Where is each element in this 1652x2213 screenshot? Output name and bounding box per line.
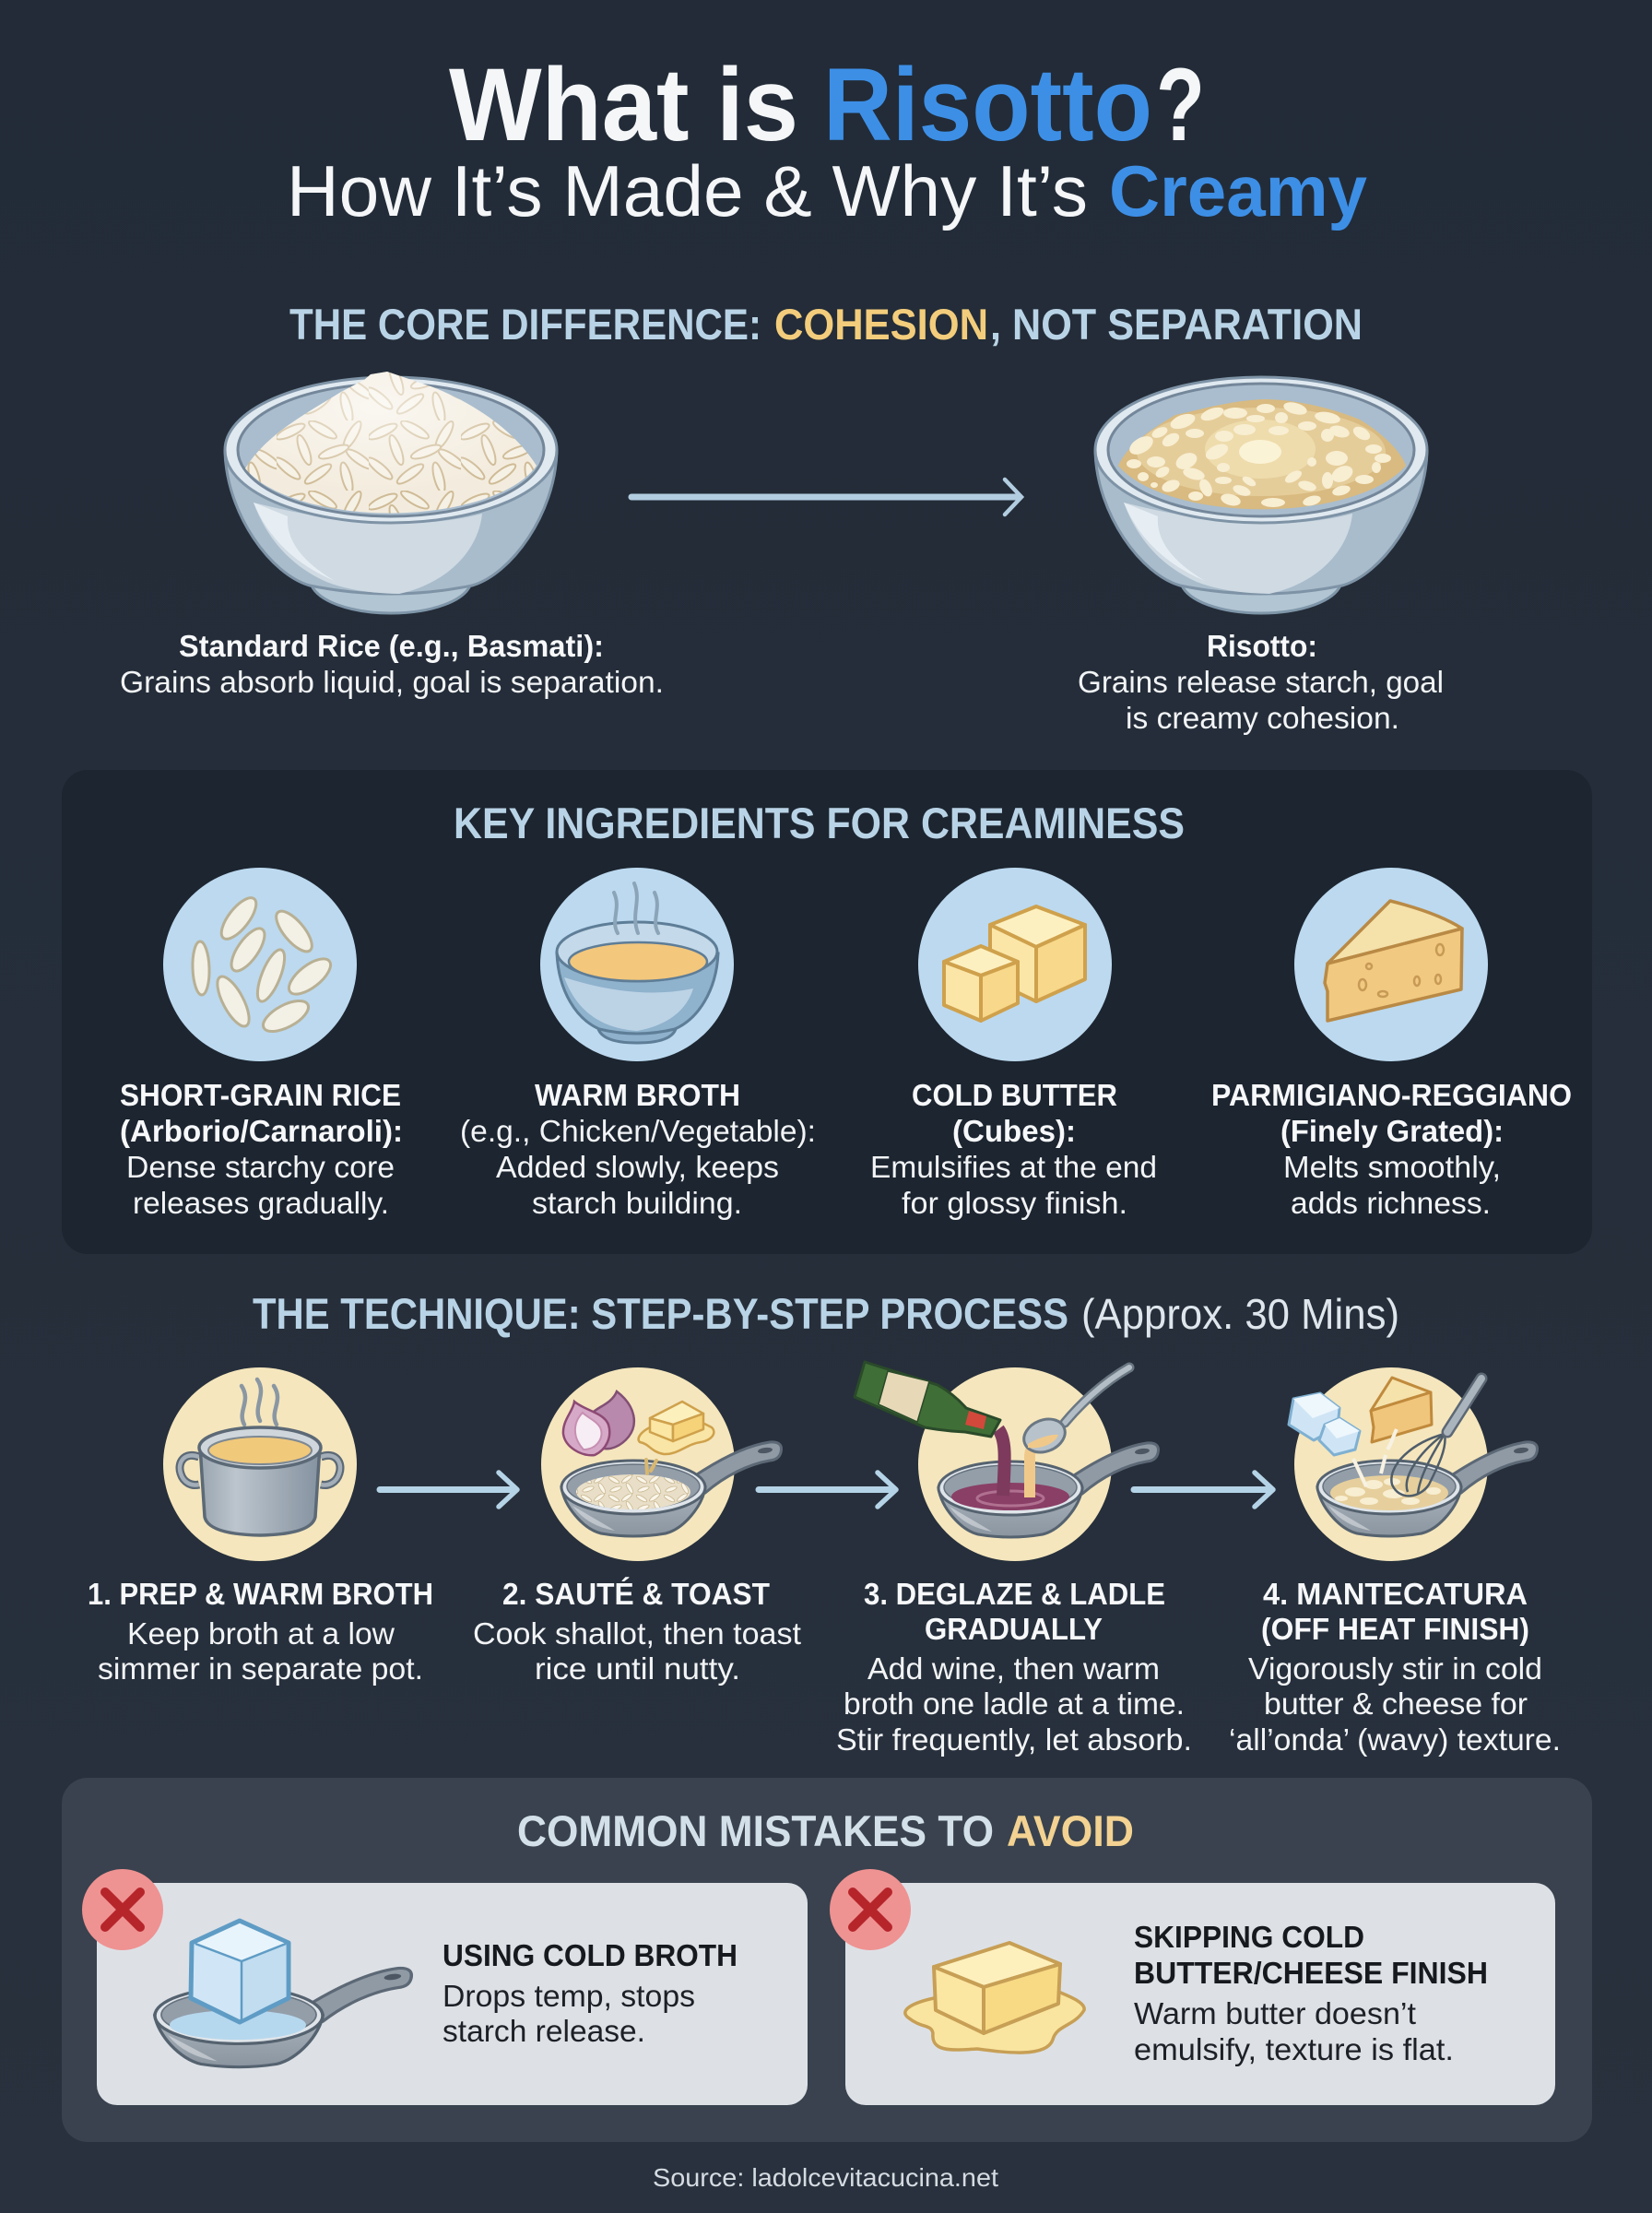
ingredient text: warm broth: starch building.: [532, 1186, 742, 1220]
arrow: rice to risotto: [631, 479, 1021, 515]
arrow: step 1 to 2: [380, 1473, 517, 1507]
text: skipping cold butter: Warm butter doesn’t: [1134, 1996, 1416, 2030]
step 2 text: [473, 1577, 801, 1686]
panel: key ingredients: [62, 770, 1592, 1254]
heading: key ingredients: KEY INGREDIENTS FOR CREAMINESS: [454, 799, 1185, 847]
heading: technique: THE TECHNIQUE: STEP-BY-STEP PROCESS: [253, 1289, 1068, 1338]
heading: core difference: COHESION: [774, 300, 988, 349]
icon: short-grain rice: [163, 868, 357, 1061]
step 4 text: Vigorously stir in cold: [1248, 1651, 1542, 1686]
heading: technique: (Approx. 30 Mins): [1081, 1290, 1399, 1338]
heading: core difference: THE CORE DIFFERENCE:: [289, 300, 761, 349]
ingredient text: parmigiano: (Finely Grated):: [1280, 1114, 1504, 1148]
ingredient text: cold butter: (Cubes):: [952, 1114, 1076, 1148]
text: skipping cold butter: emulsify, texture is flat.: [1134, 2032, 1454, 2066]
text: using cold broth: Drops temp, stops: [442, 1979, 695, 2013]
step 2 icon: shallot, butter, pan: [541, 1367, 782, 1561]
whisk: [1391, 1379, 1481, 1496]
step 3 text: Add wine, then warm: [867, 1651, 1160, 1686]
ingredient text: short-grain rice: releases gradually.: [133, 1186, 389, 1220]
ingredient text: cold butter: COLD BUTTER: [912, 1078, 1117, 1112]
panel: common mistakes: [62, 1778, 1592, 2142]
ingredient text: parmigiano: Melts smoothly,: [1283, 1150, 1501, 1184]
caption: standard rice: Grains absorb liquid, goal is separation.: [120, 665, 664, 699]
subtitle: Creamy: [1109, 150, 1367, 231]
arrow: step 3 to 4: [1134, 1473, 1273, 1507]
icon: cold butter: [918, 868, 1112, 1061]
step 3 text: broth one ladle at a time.: [844, 1686, 1185, 1721]
icon: melting butter: [905, 1943, 1084, 2053]
step 4 text: ‘all’onda’ (wavy) texture.: [1229, 1722, 1561, 1757]
step 3 text: [836, 1577, 1192, 1757]
caption: risotto: [1078, 629, 1444, 735]
heading: common mistakes: COMMON MISTAKES TO: [517, 1806, 994, 1855]
ingredient text: short-grain rice: SHORT-GRAIN RICE: [120, 1078, 401, 1112]
icon: parmigiano: [1294, 868, 1488, 1061]
badge: red x: [82, 1869, 163, 1950]
step 1 text: simmer in separate pot.: [98, 1651, 423, 1686]
source line: Source: ladolcevitacucina.net: [653, 2163, 998, 2192]
caption: risotto: Grains release starch, goal: [1078, 665, 1444, 699]
illustration: standard rice bowl: [225, 372, 557, 613]
text: skipping cold butter: BUTTER/CHEESE FINISH: [1134, 1956, 1488, 1990]
text: using cold broth: [442, 1938, 738, 2048]
heading: core difference: [289, 300, 1363, 349]
step 3 text: GRADUALLY: [925, 1612, 1103, 1646]
text: using cold broth: starch release.: [442, 2014, 645, 2048]
step 4 text: [1229, 1577, 1561, 1757]
title: Risotto: [823, 47, 1152, 162]
ingredient text: warm broth: (e.g., Chicken/Vegetable):: [460, 1114, 816, 1148]
cheese wedge: [1371, 1378, 1432, 1442]
ingredient text: short-grain rice: (Arborio/Carnaroli):: [120, 1114, 403, 1148]
step 4 text: butter & cheese for: [1264, 1686, 1528, 1721]
arrow: step 2 to 3: [759, 1473, 896, 1507]
step 3 text: 3. DEGLAZE & LADLE: [864, 1577, 1165, 1611]
wine bottle: [855, 1362, 1000, 1437]
ingredient text: warm broth: [460, 1078, 816, 1220]
step 4 text: (OFF HEAT FINISH): [1261, 1612, 1529, 1646]
step 4 icon: ice, cheese, whisk, pan: [1289, 1367, 1538, 1561]
ingredient text: warm broth: WARM BROTH: [535, 1078, 740, 1112]
ingredient text: cold butter: for glossy finish.: [902, 1186, 1127, 1220]
ingredient text: short-grain rice: Dense starchy core: [126, 1150, 395, 1184]
step 2 text: rice until nutty.: [535, 1651, 740, 1686]
step 1 text: [88, 1577, 433, 1686]
caption: risotto: Risotto:: [1207, 629, 1317, 663]
ladle: [1019, 1367, 1129, 1458]
step 3 icon: wine, ladle, pan: [855, 1362, 1158, 1561]
ingredient text: cold butter: Emulsifies at the end: [870, 1150, 1157, 1184]
card: skipping cold butter: [830, 1869, 1555, 2105]
icon: cold-broth pan with ice cube: [155, 1921, 411, 2067]
ingredient text: parmigiano: adds richness.: [1291, 1186, 1491, 1220]
step 1 text: 1. PREP & WARM BROTH: [88, 1577, 433, 1611]
ingredient text: warm broth: Added slowly, keeps: [496, 1150, 779, 1184]
heading: core difference: , NOT SEPARATION: [990, 300, 1363, 349]
ingredient text: parmigiano: [1211, 1078, 1572, 1220]
text: using cold broth: USING COLD BROTH: [442, 1938, 738, 1972]
title: What is: [449, 47, 798, 162]
step 1 icon: pot of broth: [163, 1367, 357, 1561]
illustration: risotto bowl: [1095, 377, 1427, 613]
text: skipping cold butter: SKIPPING COLD: [1134, 1920, 1364, 1954]
shallot: [563, 1391, 634, 1455]
step 2 text: Cook shallot, then toast: [473, 1616, 801, 1651]
step 2 text: 2. SAUTÉ & TOAST: [502, 1577, 770, 1611]
step 3 text: Stir frequently, let absorb.: [836, 1722, 1192, 1757]
ice cubes: [1289, 1393, 1360, 1455]
butter pat: [639, 1402, 714, 1454]
badge: red x: [830, 1869, 911, 1950]
caption: risotto: is creamy cohesion.: [1126, 701, 1399, 735]
caption: standard rice: Standard Rice (e.g., Basmati):: [179, 629, 604, 663]
step 4 text: 4. MANTECATURA: [1263, 1577, 1528, 1611]
card: using cold broth: [82, 1869, 808, 2105]
icon: warm broth: [540, 868, 734, 1061]
ingredient text: parmigiano: PARMIGIANO-REGGIANO: [1211, 1078, 1572, 1112]
ingredient text: cold butter: [870, 1078, 1157, 1220]
text: skipping cold butter: [1134, 1920, 1488, 2066]
heading: common mistakes: AVOID: [1007, 1806, 1134, 1855]
caption: standard rice: [120, 629, 664, 699]
title: ?: [1156, 47, 1205, 162]
step 1 text: Keep broth at a low: [127, 1616, 395, 1651]
title: [449, 47, 1205, 162]
ingredient text: short-grain rice: [120, 1078, 403, 1220]
subtitle: How It’s Made & Why It’s: [287, 150, 1088, 231]
